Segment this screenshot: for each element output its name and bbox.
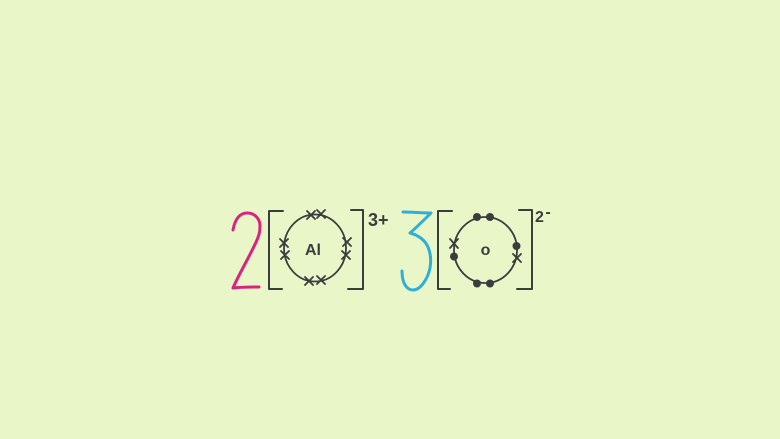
electron shell	[454, 217, 517, 283]
element label: Al: Al	[305, 242, 321, 259]
coefficient 3	[402, 212, 431, 290]
electron dots	[450, 213, 520, 288]
element label: O: o	[481, 242, 491, 259]
charge: 3+: 3+	[368, 210, 389, 230]
charge: 2-: -	[545, 204, 551, 221]
electron crosses	[280, 210, 351, 285]
left bracket	[269, 211, 283, 289]
right bracket	[348, 210, 363, 289]
charge: 2-: 2	[535, 209, 544, 226]
electron crosses	[450, 239, 521, 262]
coefficient 2	[233, 213, 260, 288]
right bracket	[517, 210, 532, 289]
aluminium ion	[269, 210, 389, 289]
left bracket	[438, 211, 452, 289]
oxide ion	[438, 204, 551, 289]
electron shell	[284, 214, 346, 282]
